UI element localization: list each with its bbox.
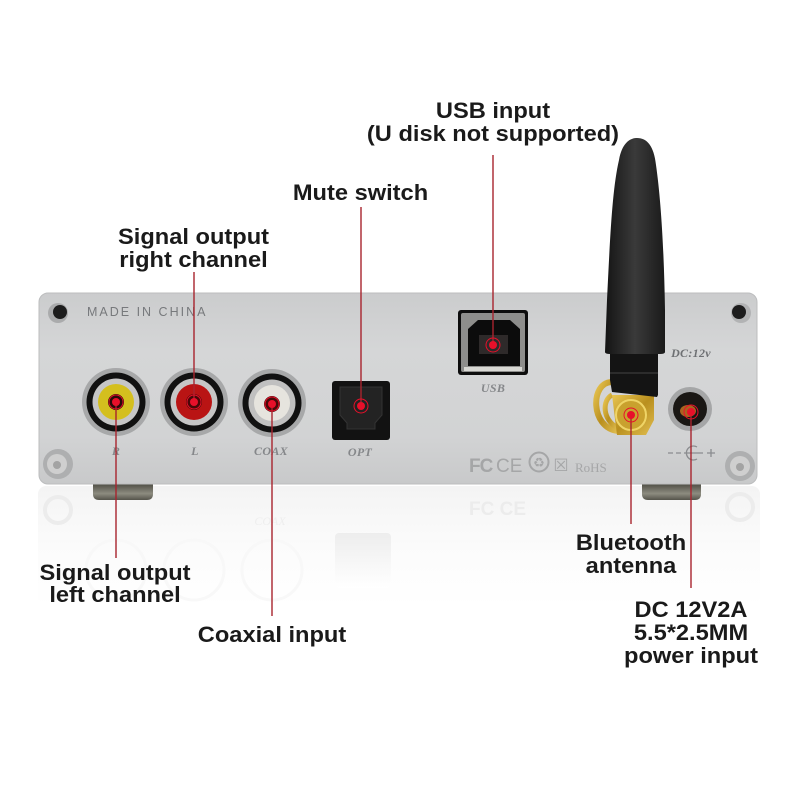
- screw hole top right: [731, 303, 751, 323]
- compliance marks: [469, 452, 607, 477]
- polarity symbol: [668, 446, 715, 460]
- screw bottom right: [725, 451, 755, 481]
- antenna: [605, 138, 665, 397]
- compliance marks: ☒: [553, 456, 569, 475]
- compliance marks: FC: [469, 456, 494, 477]
- DC power jack: [668, 387, 712, 431]
- port labels: L: [190, 444, 199, 458]
- reflection under device: FC CE: [469, 499, 526, 520]
- pointer dots: [109, 338, 698, 422]
- label: signal output right channel: right channel: [119, 247, 268, 272]
- port labels: OPT: [348, 445, 372, 459]
- RCA jack right red: [160, 368, 228, 436]
- label: DC power input: power input: [624, 643, 758, 668]
- foot left: [93, 484, 153, 500]
- compliance marks: ♻: [533, 455, 545, 470]
- label: bluetooth antenna: Bluetooth: [576, 530, 686, 555]
- optical port: [332, 381, 390, 440]
- label: mute switch: Mute switch: [293, 180, 428, 205]
- made in china text: MADE IN CHINA: [87, 305, 207, 319]
- USB port: [458, 310, 528, 375]
- RCA jack left yellow: [82, 368, 150, 436]
- screw hole top left: [48, 303, 68, 323]
- label: bluetooth antenna: antenna: [586, 553, 677, 578]
- label: coaxial input: Coaxial input: [198, 622, 347, 647]
- device panel: [39, 293, 757, 484]
- label: signal output left channel: left channel: [49, 582, 181, 607]
- port labels: R: [111, 444, 120, 458]
- reflection under device: [38, 486, 760, 606]
- label: DC power input: 5.5*2.5MM: [634, 620, 748, 645]
- port labels: DC:12v: [670, 346, 711, 360]
- port labels: [111, 346, 711, 459]
- gold antenna connector: [596, 382, 654, 435]
- label: USB input: USB input: [436, 98, 550, 123]
- port labels: USB: [481, 381, 505, 395]
- compliance marks: RoHS: [575, 460, 607, 475]
- label: USB input: (U disk not supported): [367, 121, 619, 146]
- label: DC power input: DC 12V2A: [635, 597, 747, 622]
- compliance marks: CE: [496, 456, 522, 477]
- reflection under device: COAX: [254, 514, 286, 528]
- coaxial jack: [238, 369, 306, 437]
- label: signal output right channel: Signal output: [118, 224, 269, 249]
- pointer lines: [116, 155, 691, 616]
- foot right: [642, 484, 701, 500]
- port labels: COAX: [254, 444, 289, 458]
- label: signal output left channel: Signal output: [39, 560, 191, 585]
- screw bottom left: [43, 449, 73, 479]
